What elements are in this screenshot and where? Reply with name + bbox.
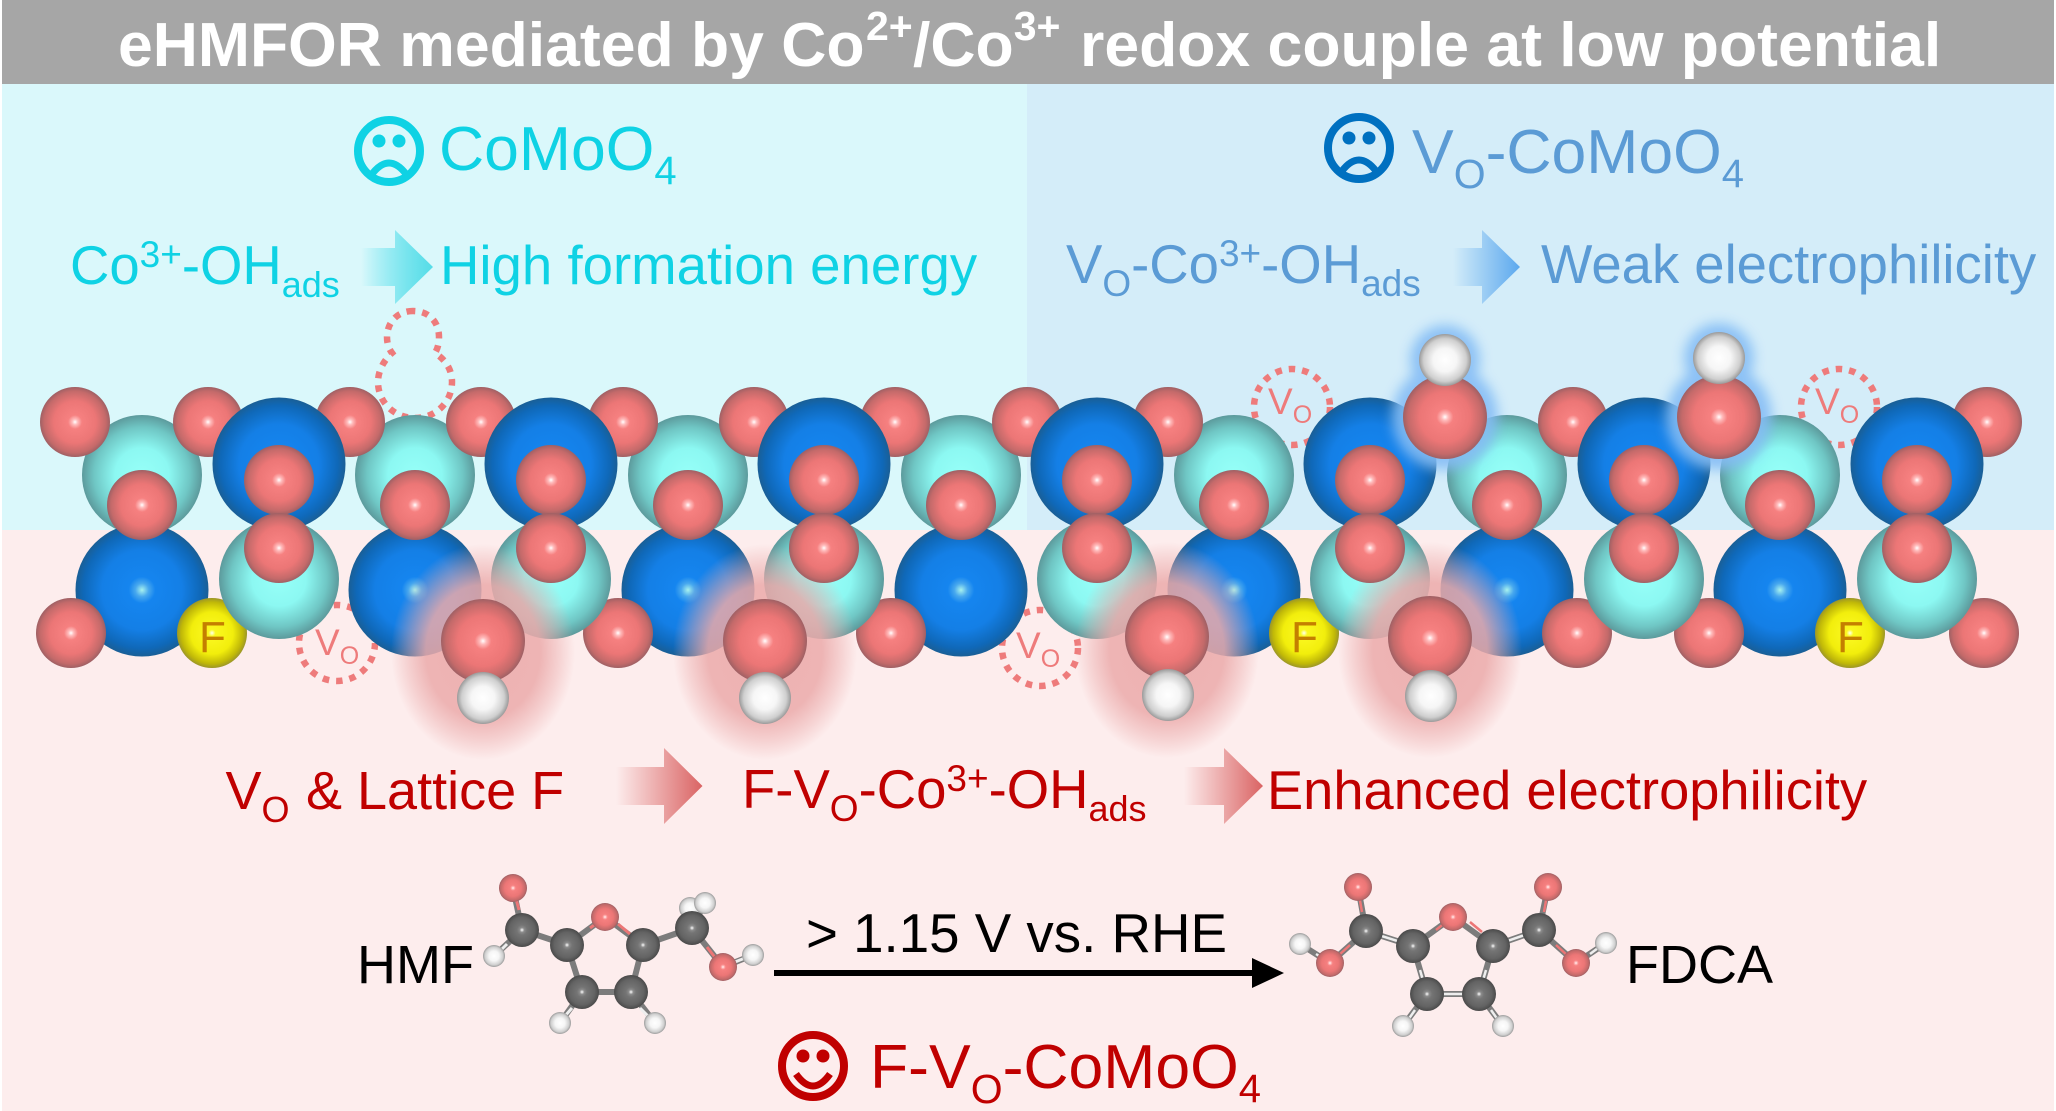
heading: F-Vo-CoMoO4: -CoMoO — [1003, 1032, 1239, 1102]
arrow: red 2 — [1184, 748, 1263, 824]
text: Co3+-OHads: 3+ — [140, 234, 182, 275]
text: Co3+-OHads: Co — [70, 235, 140, 296]
oxygen atoms on cyan sites — [107, 470, 1815, 540]
text: Vo-Co3+-OHads: V — [1066, 234, 1102, 295]
arrow: reaction — [774, 958, 1284, 988]
title bar: 2+ — [866, 3, 913, 49]
arrow: cyan — [361, 230, 433, 304]
text: Enhanced electrophilicity: Enhanced electrophilicity — [1267, 761, 1868, 821]
text: Weak electrophilicity: Weak electrophilicity — [1541, 234, 2037, 295]
title bar: 3+ — [1014, 3, 1060, 49]
vacancy labels: O — [1293, 401, 1312, 429]
vacancy labels: O — [1041, 645, 1060, 673]
text: Vo-Co3+-OHads: O — [1102, 263, 1131, 304]
icon: smiling face — [782, 1035, 844, 1097]
oxygen vacancy markers — [299, 311, 1877, 686]
adsorbed hydroxyl groups, lower — [441, 595, 1472, 724]
upper row oxygen atoms — [40, 387, 2022, 457]
heading: F-Vo-CoMoO4: 4 — [1239, 1067, 1261, 1111]
label: HMF: HMF — [357, 935, 474, 995]
text: Vo & Lattice F: V — [226, 761, 262, 821]
text: Vo-Co3+-OHads: 3+ — [1219, 233, 1261, 274]
panel: Vo-CoMoO4 background — [1027, 84, 2054, 530]
heading: F-Vo-CoMoO4: F-V — [870, 1032, 971, 1102]
oxygen pairs on blue sites — [244, 445, 1952, 583]
text: Co3+-OHads: -OH — [182, 235, 282, 296]
title bar: eHMFOR mediated by Co — [118, 10, 865, 80]
heading: Vo-CoMoO4 with sad face: 4 — [1722, 152, 1744, 196]
heading: Vo-CoMoO4 with sad face — [1328, 117, 1744, 197]
text: F-Vo-Co3+-OHads: O — [830, 788, 859, 829]
text: F-Vo-Co3+-OHads: -Co — [859, 759, 946, 820]
blue glows around upper hydroxyls — [1392, 323, 1772, 470]
red glows around lower hydroxyls — [391, 542, 1522, 760]
heading: CoMoO4 with sad face: CoMoO — [439, 114, 654, 184]
text: Vo & Lattice F: O — [262, 789, 290, 830]
arrow: blue — [1453, 230, 1520, 304]
fluorine atoms — [177, 598, 1885, 668]
panel: CoMoO4 background — [2, 84, 1027, 530]
reaction label: > 1.15 V vs. RHE — [806, 902, 1227, 964]
vacancy labels: V — [1016, 625, 1041, 666]
text: Vo-Co3+-OHads: -OH — [1261, 234, 1361, 295]
fluorine labels: F — [199, 613, 226, 662]
heading: Vo-CoMoO4 with sad face: O — [1454, 151, 1486, 197]
lower row blue atoms — [76, 524, 1846, 656]
crystal lattice model — [36, 311, 2022, 760]
heading: CoMoO4 with sad face — [358, 114, 677, 193]
text: F-Vo-Co3+-OHads: -OH — [989, 759, 1088, 820]
icon: sad face blue — [1328, 117, 1390, 179]
title bar — [2, 0, 2054, 84]
vacancy labels: V — [315, 622, 340, 663]
heading: Vo-CoMoO4 with sad face: -CoMoO — [1486, 117, 1722, 187]
heading: Vo-CoMoO4 with sad face: V — [1412, 117, 1454, 187]
fluorine labels — [199, 613, 1864, 662]
text: F-Vo-Co3+-OHads: F-V — [742, 759, 830, 820]
text: High formation energy: High formation energy — [440, 235, 978, 296]
text: F-Vo-Co3+-OHads: ads — [1088, 788, 1147, 829]
vacancy labels: O — [1840, 401, 1859, 429]
label: FDCA: FDCA — [1626, 935, 1773, 995]
title bar: redox couple at low potential — [1080, 10, 1941, 80]
text: Co3+-OHads: ads — [282, 264, 340, 305]
molecule: FDCA — [1289, 873, 1617, 1037]
vacancy labels: O — [340, 642, 359, 670]
text: Vo-Co3+-OHads: -Co — [1131, 234, 1219, 295]
vacancy labels: V — [1268, 381, 1293, 422]
title bar: /Co — [913, 10, 1014, 80]
arrow: red 1 — [616, 748, 702, 824]
fluorine labels: F — [1837, 613, 1864, 662]
upper row blue atoms — [212, 398, 1984, 530]
text: F-Vo-Co3+-OHads: 3+ — [946, 758, 989, 799]
vacancy labels: V — [1815, 381, 1840, 422]
lower row oxygen atoms — [36, 598, 2019, 668]
icon: sad face cyan — [358, 120, 420, 182]
heading: F-Vo-CoMoO4: O — [971, 1066, 1003, 1111]
molecule: HMF — [483, 874, 764, 1034]
panel: pink lower background — [2, 530, 2054, 1111]
adsorbed hydroxyl groups, upper — [1403, 332, 1761, 459]
fluorine labels: F — [1291, 613, 1318, 662]
text: Vo-Co3+-OHads: ads — [1361, 263, 1421, 304]
lower row cyan atoms — [219, 519, 1977, 639]
text: Vo & Lattice F: & Lattice F — [306, 761, 564, 821]
heading: CoMoO4 with sad face: 4 — [654, 149, 677, 193]
vacancy labels — [315, 381, 1859, 673]
upper row cyan atoms — [82, 415, 1840, 535]
